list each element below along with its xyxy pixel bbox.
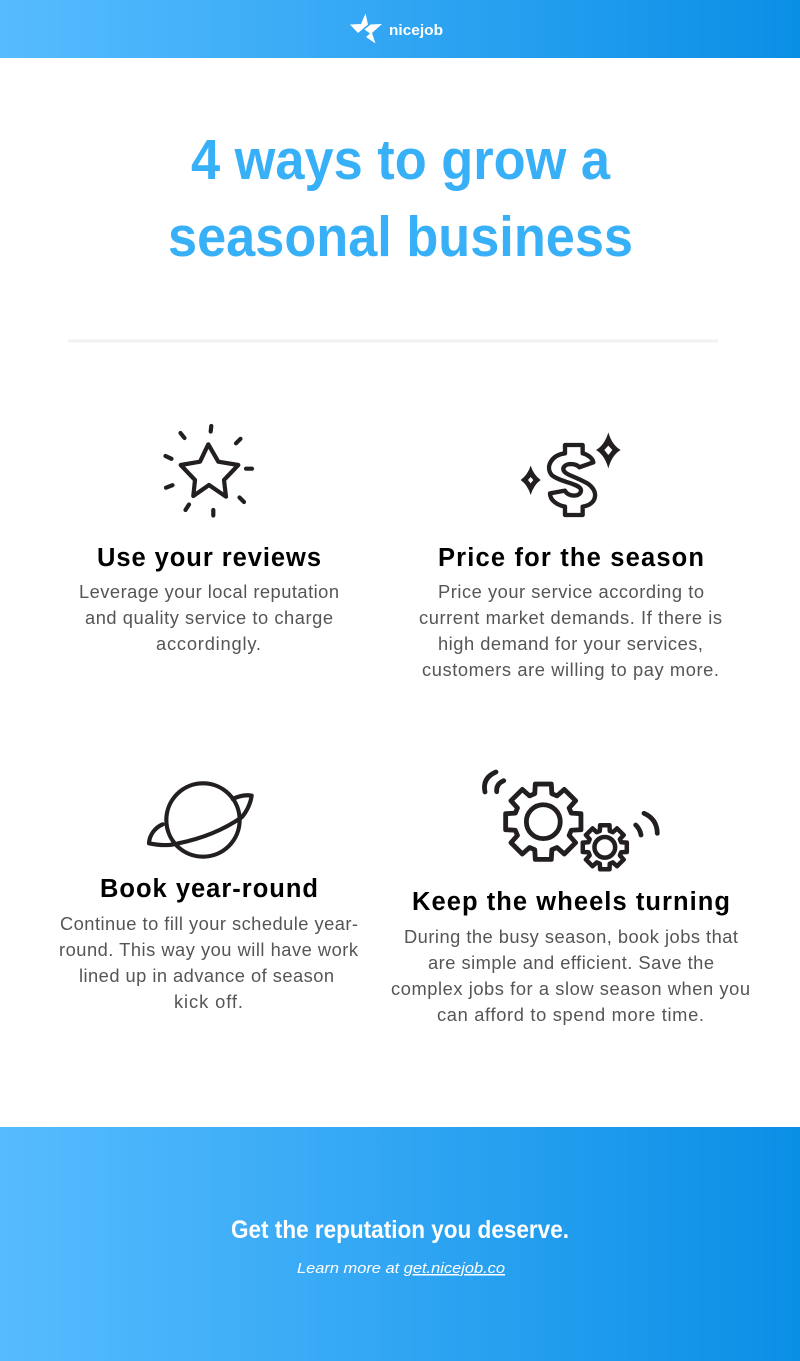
body text: high demand for your services, bbox=[438, 633, 703, 654]
logo wordmark: nicejob bbox=[389, 22, 443, 39]
footer headline: Get the reputation you deserve. bbox=[231, 1216, 569, 1244]
heading: Keep the wheels turning bbox=[412, 888, 730, 916]
body text: Continue to fill your schedule year- bbox=[60, 913, 358, 934]
body text bbox=[391, 926, 750, 1025]
body text: accordingly. bbox=[156, 633, 261, 654]
body text: current market demands. If there is bbox=[419, 607, 722, 628]
title: 4 ways to grow a bbox=[191, 128, 611, 192]
icon: logo star bbox=[350, 14, 382, 44]
body text: round. This way you will have work bbox=[59, 939, 359, 960]
title: seasonal business bbox=[168, 205, 633, 269]
icon: ringed planet bbox=[149, 783, 252, 857]
body text: are simple and efficient. Save the bbox=[428, 952, 714, 973]
title bbox=[168, 128, 633, 269]
body text bbox=[419, 581, 722, 680]
heading: Book year-round bbox=[100, 875, 318, 903]
heading: Use your reviews bbox=[97, 544, 321, 572]
body text: Price your service according to bbox=[438, 581, 704, 602]
body text bbox=[79, 581, 339, 654]
body text: can afford to spend more time. bbox=[437, 1004, 704, 1025]
icon: star with rays bbox=[166, 426, 252, 516]
body text: customers are willing to pay more. bbox=[422, 659, 719, 680]
body text: Leverage your local reputation bbox=[79, 581, 339, 602]
icon: turning gears bbox=[484, 772, 657, 869]
header band bbox=[0, 0, 800, 58]
panel: use your reviews bbox=[79, 426, 339, 654]
footer band bbox=[0, 1127, 800, 1361]
icon: dollar sign with sparkles bbox=[521, 432, 621, 515]
heading: Price for the season bbox=[438, 544, 704, 572]
panel: price for the season bbox=[419, 432, 722, 680]
body text: lined up in advance of season bbox=[79, 965, 334, 986]
body text: complex jobs for a slow season when you bbox=[391, 978, 750, 999]
panel: keep the wheels turning bbox=[391, 772, 750, 1025]
body text: kick off. bbox=[174, 991, 243, 1012]
footer link line: Learn more at get.nicejob.co bbox=[297, 1260, 505, 1277]
panel: book year-round bbox=[59, 783, 359, 1012]
logo: nicejob bbox=[350, 14, 443, 44]
body text: During the busy season, book jobs that bbox=[404, 926, 738, 947]
body text: and quality service to charge bbox=[85, 607, 333, 628]
body text bbox=[59, 913, 359, 1012]
